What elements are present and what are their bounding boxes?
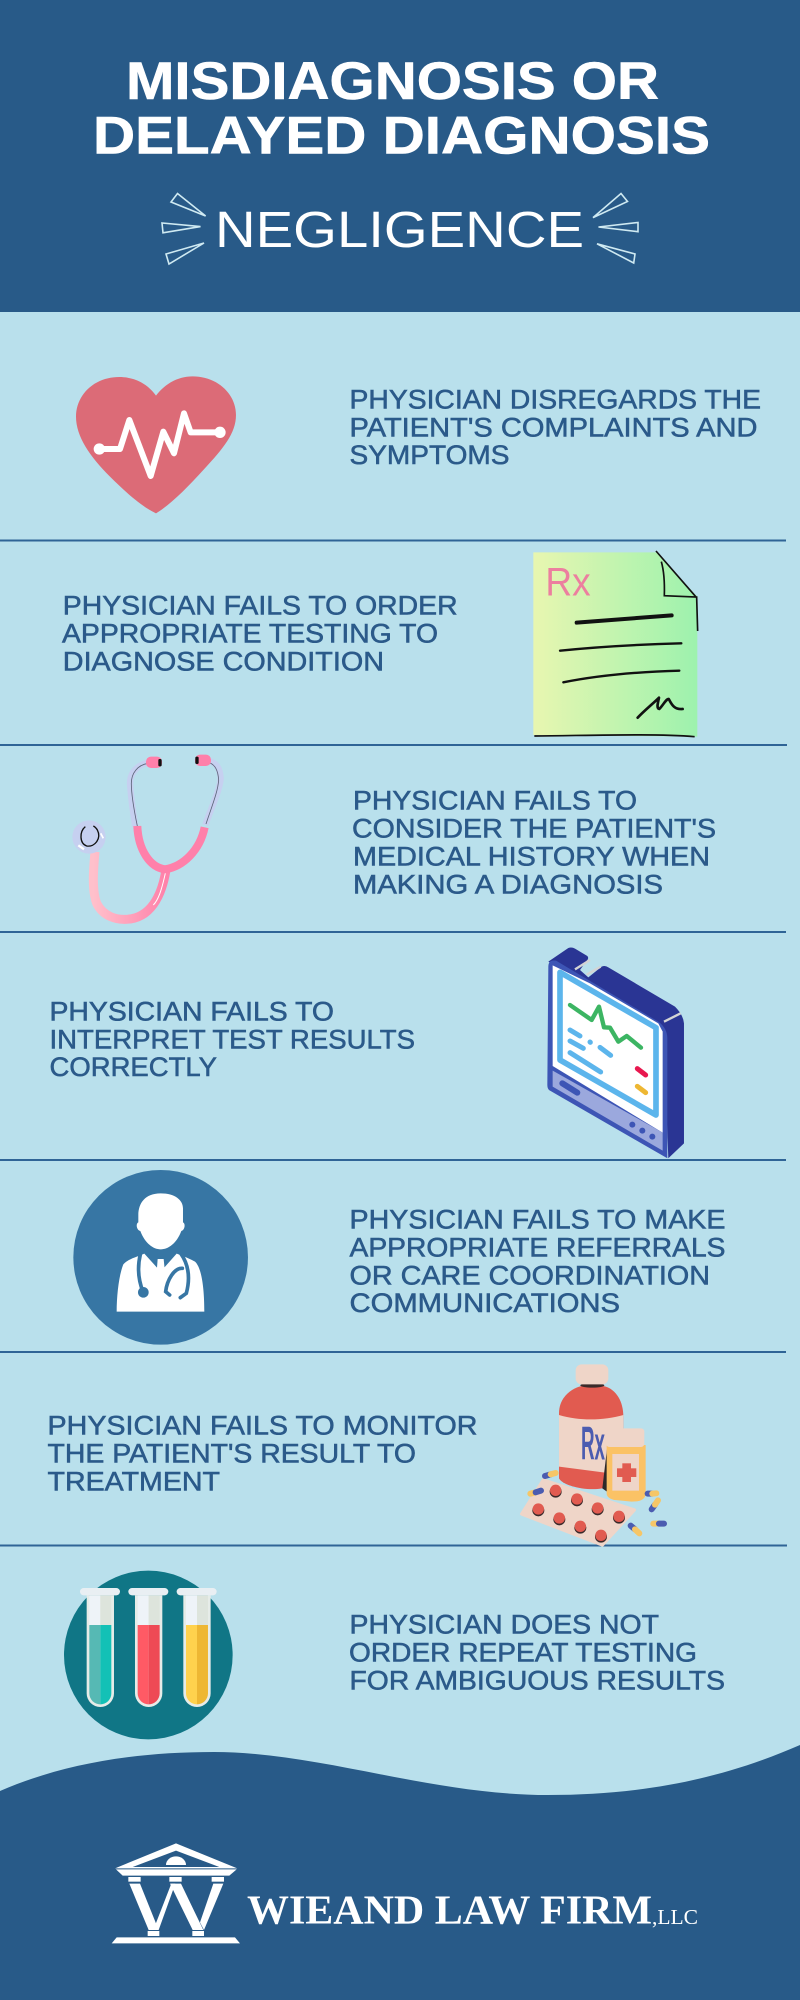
- text: interpret results: [50, 996, 415, 1082]
- panel: row 2 fails to order testing: [62, 551, 698, 737]
- panel: header: [0, 0, 800, 312]
- text: order testing: APPROPRIATE TESTING TO: [62, 618, 438, 648]
- panel: row 1 disregards complaints: [76, 376, 761, 513]
- title: MISDIAGNOSIS OR: [126, 52, 659, 111]
- icon: law firm logo: [112, 1843, 240, 1943]
- text: disregards complaints: [350, 385, 761, 470]
- text: medical history: MEDICAL HISTORY WHEN: [353, 841, 710, 871]
- panel: row 4 interpret results: [50, 947, 684, 1158]
- text: order testing: PHYSICIAN FAILS TO ORDER: [63, 590, 458, 620]
- text: monitor result: PHYSICIAN FAILS TO MONITOR: [48, 1410, 477, 1440]
- icon: doctor in circle: [73, 1170, 248, 1345]
- text: repeat testing: PHYSICIAN DOES NOT: [350, 1610, 659, 1640]
- text: disregards complaints: PHYSICIAN DISREGARDS THE: [350, 385, 761, 415]
- title: DELAYED DIAGNOSIS: [93, 106, 710, 166]
- panel: row 5 referrals: [73, 1170, 725, 1345]
- panel: row 7 repeat testing: [64, 1571, 725, 1739]
- text: referrals: OR CARE COORDINATION: [350, 1260, 710, 1290]
- text: disregards complaints: PATIENT'S COMPLAINTS AND: [350, 413, 758, 443]
- icon: medicine bottles and pills: [522, 1364, 664, 1545]
- text: interpret results: CORRECTLY: [50, 1052, 217, 1082]
- text: repeat testing: FOR AMBIGUOUS RESULTS: [350, 1665, 725, 1695]
- text: referrals: PHYSICIAN FAILS TO MAKE: [350, 1204, 726, 1234]
- panel: row 3 medical history: [72, 755, 716, 919]
- text: medical history: PHYSICIAN FAILS TO: [353, 786, 637, 816]
- text: medical history: [352, 786, 716, 899]
- text: medical history: CONSIDER THE PATIENT'S: [352, 814, 716, 844]
- text: monitor result: [48, 1410, 477, 1497]
- icon: prescription sheet: [533, 551, 698, 737]
- text: monitor result: THE PATIENT'S RESULT TO: [48, 1438, 416, 1468]
- title: [93, 52, 710, 166]
- icon: heart with pulse: [76, 376, 236, 513]
- icon: burst rays: [162, 194, 638, 264]
- text: referrals: [350, 1204, 726, 1318]
- text: referrals: COMMUNICATIONS: [350, 1288, 620, 1318]
- icon: stethoscope: [72, 755, 221, 919]
- logo wordmark: WIEAND LAW FIRM: [247, 1886, 652, 1932]
- icon: patient monitor: [547, 947, 684, 1158]
- icon: test tubes: [64, 1571, 233, 1739]
- text: interpret results: PHYSICIAN FAILS TO: [50, 996, 334, 1026]
- icon: medicine bottles and pills: Rx: [581, 1417, 605, 1470]
- logo suffix: ,LLC: [652, 1905, 698, 1929]
- text: disregards complaints: SYMPTOMS: [350, 440, 510, 470]
- text: interpret results: INTERPRET TEST RESULTS: [50, 1024, 415, 1054]
- text: order testing: [62, 590, 458, 676]
- panel: row 6 monitor result: [48, 1364, 664, 1545]
- text: repeat testing: [349, 1610, 725, 1695]
- text: monitor result: TREATMENT: [48, 1467, 220, 1497]
- panel: footer wave: [0, 1745, 800, 2000]
- text: order testing: DIAGNOSE CONDITION: [63, 646, 384, 676]
- text: referrals: APPROPRIATE REFERRALS: [350, 1232, 726, 1262]
- text: medical history: MAKING A DIAGNOSIS: [353, 869, 663, 899]
- text: repeat testing: ORDER REPEAT TESTING: [349, 1638, 697, 1668]
- subtitle: negligence: NEGLIGENCE: [215, 201, 584, 258]
- icon: prescription sheet: Rx: [545, 561, 591, 605]
